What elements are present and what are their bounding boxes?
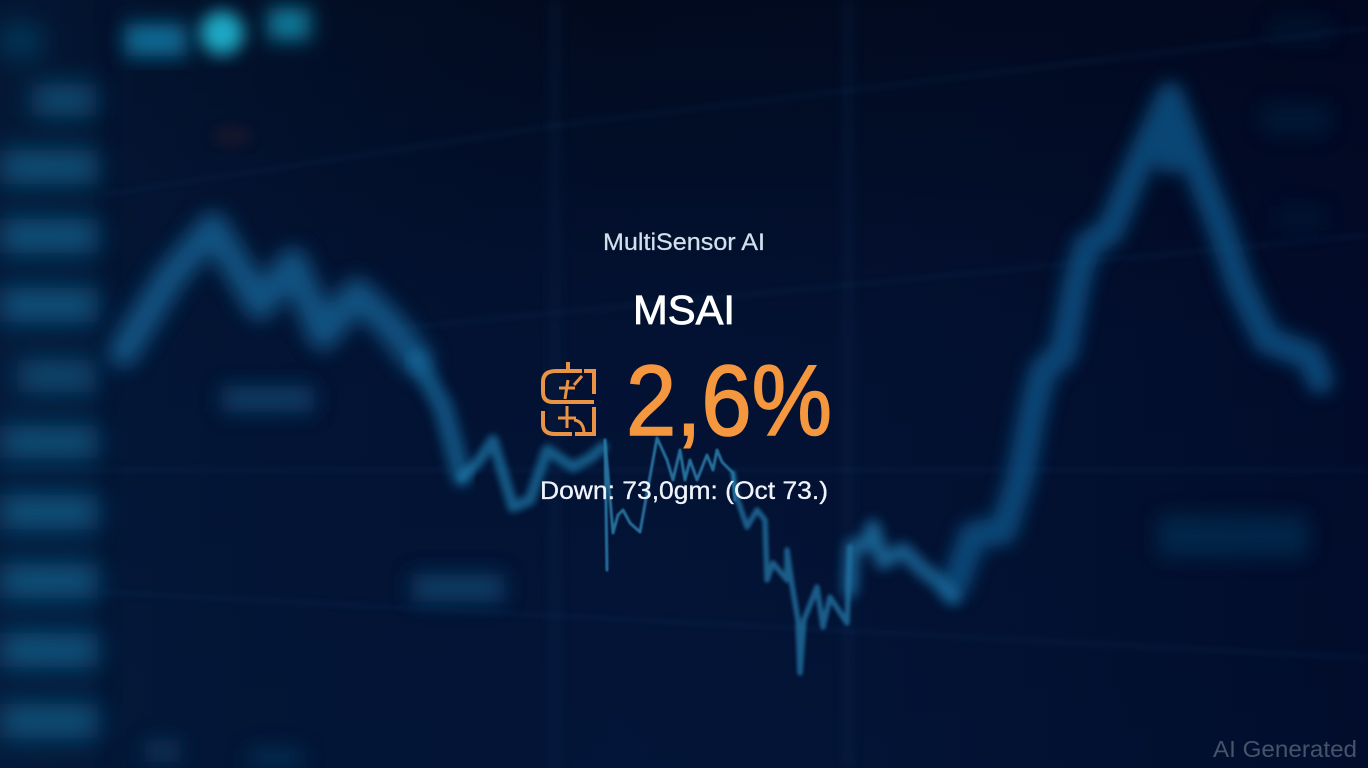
ticker: MSAI (633, 287, 735, 333)
mid chart line, slightly soft (850, 527, 953, 597)
watermark: AI Generated (1213, 736, 1357, 762)
caption: Down: 73,0gm: (Oct 73.) (540, 477, 828, 505)
blurred right chart line (955, 96, 1320, 585)
icon: stylised dollar sign (543, 362, 594, 434)
company name: MultiSensor AI (603, 229, 765, 256)
top glowing marker, blurred (125, 8, 310, 56)
left axis labels, blurred (0, 25, 98, 738)
sharp chart line (605, 438, 850, 673)
change percentage: 2,6% (626, 345, 832, 457)
blurred left chart line (123, 227, 603, 507)
faint red blur (212, 125, 252, 147)
